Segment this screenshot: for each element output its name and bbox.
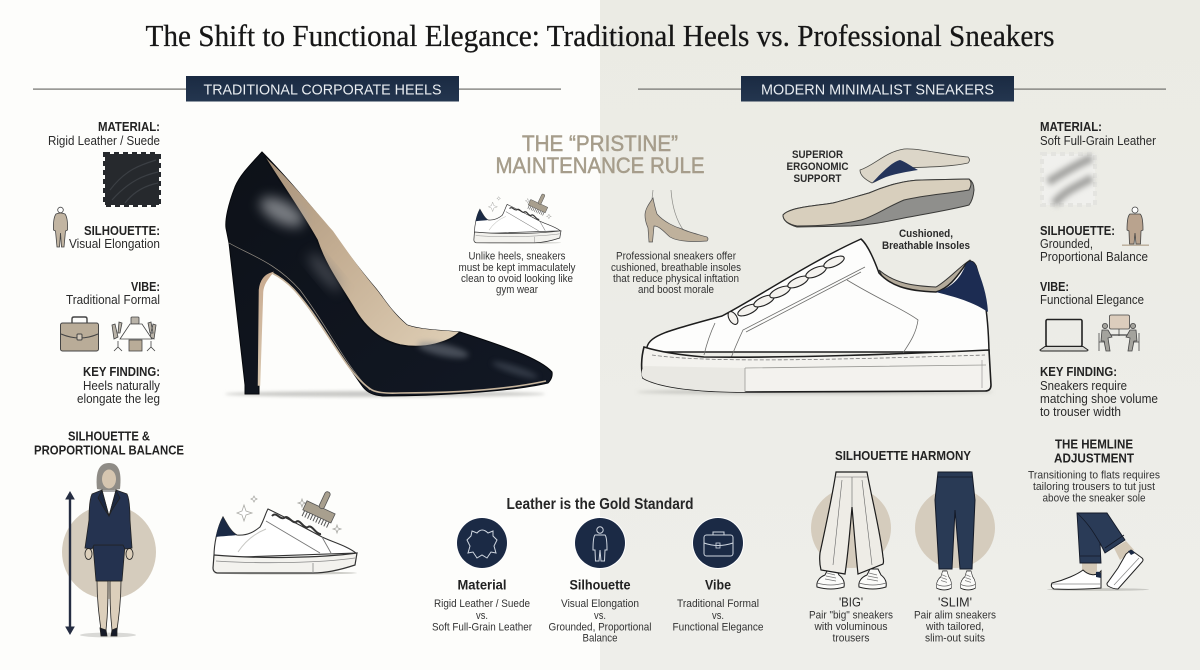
key finding text	[1040, 364, 1158, 419]
key finding text: elongate the leg	[77, 391, 160, 406]
silhouette text	[1040, 223, 1148, 264]
text: cushioned insoles benefit: cushioned, breathable insoles	[611, 262, 741, 274]
label: superior ergonomic support: SUPPORT	[794, 173, 842, 185]
slim caption: Pair alim sneakers	[914, 610, 996, 622]
key finding text: to trouser width	[1040, 404, 1121, 419]
white minimalist sneaker	[637, 239, 993, 394]
title: The Shift to Functional Elegance: Traditional Heels vs. Professional Sneakers	[146, 18, 1054, 53]
key finding text	[77, 364, 160, 406]
big caption	[809, 594, 893, 644]
vibe text: Traditional Formal	[66, 292, 160, 307]
icon: hide	[456, 517, 508, 569]
column: silhouette: Silhouette	[570, 576, 631, 592]
text: keep sneakers clean	[458, 250, 576, 296]
icon: laptop	[1040, 320, 1088, 351]
lining	[264, 156, 460, 347]
silhouette harmony block	[809, 449, 996, 644]
column: material: Soft Full-Grain Leather	[432, 622, 532, 634]
material text: Soft Full-Grain Leather	[1040, 133, 1157, 148]
beige circle	[62, 505, 156, 599]
heading	[34, 428, 184, 458]
highlights	[256, 191, 539, 381]
icon: soft leather swatch	[1042, 154, 1095, 205]
vibe text: VIBE:	[1040, 279, 1069, 294]
big caption: 'BIG'	[839, 594, 863, 610]
material text	[48, 119, 160, 148]
maintenance rule heading	[496, 131, 704, 178]
proportional balance block	[34, 428, 184, 637]
right column: sneaker attributes	[1040, 119, 1158, 419]
heading: Leather is the Gold Standard	[506, 496, 694, 513]
icon: beige heel on foot	[645, 190, 708, 242]
key finding text: KEY FINDING:	[1040, 364, 1117, 379]
text: keep sneakers clean: Unlike heels, sneakers	[468, 250, 566, 262]
column: material: Material	[458, 576, 506, 592]
icon: conference table	[112, 317, 156, 351]
text: keep sneakers clean: gym wear	[496, 284, 538, 296]
left column: heel attributes	[48, 119, 160, 406]
heading: SILHOUETTE &	[68, 428, 150, 444]
black stiletto pump	[225, 152, 552, 397]
key finding text: Sneakers require	[1040, 378, 1127, 393]
column: silhouette	[548, 517, 652, 644]
legs and sneakers	[1047, 513, 1149, 591]
big trousers illustration	[811, 472, 891, 589]
navy heel tab	[936, 261, 988, 312]
column: silhouette: vs.	[594, 610, 606, 622]
silhouette text: SILHOUETTE:	[84, 223, 160, 238]
label: cushioned breathable insoles: Cushioned,	[899, 228, 953, 240]
vibe text: Functional Elegance	[1040, 292, 1144, 307]
label: cushioned breathable insoles	[882, 228, 970, 252]
heading	[1054, 436, 1134, 466]
text: cushioned insoles benefit: Professional sneakers offer	[616, 250, 736, 262]
shadow	[637, 390, 993, 394]
column: silhouette: Balance	[582, 632, 618, 644]
slim caption	[914, 594, 996, 644]
slim caption: 'SLIM'	[938, 594, 972, 610]
silhouette text: SILHOUETTE:	[1040, 223, 1115, 238]
text: cushioned insoles benefit: that reduce physical inftation	[613, 273, 739, 285]
column: vibe: Functional Elegance	[672, 622, 764, 634]
header: traditional corporate heels: TRADITIONAL CORPORATE HEELS	[204, 82, 442, 98]
icon: briefcase	[60, 317, 98, 351]
maintenance rule heading: THE “PRISTINE”	[522, 131, 678, 156]
icon: briefcase	[692, 517, 744, 569]
key finding text: matching shoe volume	[1040, 391, 1158, 406]
heading: PROPORTIONAL BALANCE	[34, 442, 184, 458]
big caption: with voluminous	[814, 621, 888, 633]
column: vibe: Traditional Formal	[677, 598, 759, 610]
heading: THE HEMLINE	[1055, 436, 1133, 452]
body text: Transitioning to flats requires	[1028, 470, 1160, 482]
arrow: height	[66, 492, 74, 634]
material text: Rigid Leather / Suede	[48, 133, 160, 148]
body text	[1028, 470, 1160, 504]
column: material	[432, 517, 532, 634]
label: cushioned breathable insoles: Breathable Insoles	[882, 240, 970, 252]
icon: figure	[574, 517, 626, 569]
collar lining	[879, 260, 975, 296]
text: keep sneakers clean: clean to ovoid looking like	[461, 273, 573, 285]
column: vibe: Vibe	[705, 576, 731, 592]
column: vibe	[672, 517, 764, 634]
body text: tailoring trousers to tut just	[1033, 481, 1155, 493]
maintenance rule heading: MAINTENANCE RULE	[496, 153, 704, 178]
insole illustration	[783, 149, 974, 227]
material text	[1040, 119, 1157, 148]
column: material: vs.	[476, 610, 488, 622]
column: silhouette: Visual Elongation	[561, 598, 639, 610]
cleaning sneaker, lower left	[213, 485, 357, 575]
key finding text: KEY FINDING:	[83, 364, 160, 379]
laces	[726, 254, 846, 326]
icon: black leather swatch	[105, 154, 159, 205]
text: keep sneakers clean: must be kept immaculately	[458, 262, 576, 274]
icon: meeting at desk	[1099, 315, 1139, 351]
shadow	[225, 391, 545, 397]
big caption: Pair "big" sneakers	[809, 610, 893, 622]
label: superior ergonomic support	[786, 149, 849, 185]
vibe text	[1040, 279, 1144, 307]
silhouette text: Grounded,	[1040, 236, 1093, 251]
label: superior ergonomic support: ERGONOMIC	[786, 161, 849, 173]
icon: grounded figure	[1122, 207, 1149, 246]
insole base	[783, 179, 974, 227]
slim caption: with tailored,	[925, 621, 984, 633]
left panel background	[0, 0, 600, 670]
silhouette text: Visual Elongation	[69, 236, 160, 251]
text: cushioned insoles benefit	[611, 250, 741, 296]
heading: ADJUSTMENT	[1054, 450, 1134, 466]
vibe text	[66, 279, 160, 307]
header: modern minimalist sneakers: MODERN MINIMALIST SNEAKERS	[761, 82, 994, 98]
material text: MATERIAL:	[1040, 119, 1102, 134]
slim trousers illustration	[915, 472, 995, 590]
stitching lines	[704, 267, 918, 358]
silhouette text: Proportional Balance	[1040, 249, 1148, 264]
key finding text: Heels naturally	[83, 378, 160, 393]
slim caption: slim-out suits	[925, 632, 985, 644]
header: modern minimalist sneakers	[638, 76, 1166, 102]
column: silhouette: Grounded, Proportional	[548, 622, 652, 634]
woman in suit	[80, 463, 136, 637]
hemline adjustment block	[1028, 436, 1160, 591]
lining edge	[264, 156, 460, 347]
body text: above the sneaker sole	[1042, 492, 1146, 504]
cleaning sneaker, upper	[474, 190, 561, 244]
vibe text: VIBE:	[131, 279, 160, 294]
icon: standing figure	[53, 207, 68, 247]
right panel background	[600, 0, 1200, 670]
big caption: trousers	[832, 632, 870, 644]
leather is the gold standard block	[432, 496, 764, 644]
upper	[645, 239, 989, 352]
shoe body	[226, 152, 552, 396]
column: vibe: vs.	[712, 610, 724, 622]
text: cushioned insoles benefit: and boost morale	[638, 284, 714, 296]
arch insert	[860, 149, 970, 183]
material text: MATERIAL:	[98, 119, 160, 134]
column: material: Rigid Leather / Suede	[434, 598, 530, 610]
header: traditional corporate heels	[33, 76, 561, 102]
heading: SILHOUETTE HARMONY	[835, 449, 972, 463]
label: superior ergonomic support: SUPERIOR	[792, 149, 843, 161]
silhouette text	[69, 223, 160, 251]
heel inner and sole trim	[258, 273, 272, 385]
sole	[642, 347, 991, 392]
